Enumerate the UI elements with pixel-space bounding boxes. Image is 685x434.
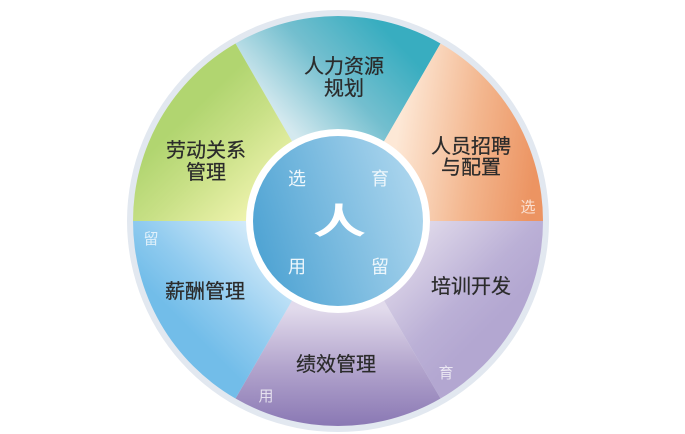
center hub: 选 bbox=[288, 169, 306, 189]
segment: 人力资源规划 bbox=[236, 16, 440, 221]
segment: 薪酬管理 bbox=[133, 221, 338, 398]
segment: 人员招聘与配置: 与配置 bbox=[441, 156, 501, 179]
segment: 劳动关系管理: 劳动关系 bbox=[166, 139, 246, 162]
segment: 培训开发 bbox=[338, 221, 543, 398]
segment: 薪酬管理: 留 bbox=[143, 231, 159, 248]
segment: 绩效管理: 绩效管理 bbox=[296, 353, 376, 376]
outer ring bbox=[127, 10, 549, 432]
center hub: 用 bbox=[288, 257, 306, 277]
segment: 绩效管理: 用 bbox=[258, 388, 274, 405]
center hub: 育 bbox=[371, 169, 389, 189]
segment: 人力资源规划: 规划 bbox=[324, 77, 364, 100]
segment: 劳动关系管理: 管理 bbox=[186, 161, 226, 184]
segment: 薪酬管理: 薪酬管理 bbox=[165, 280, 245, 303]
segment: 人力资源规划: 人力资源 bbox=[304, 55, 384, 78]
segment: 人员招聘与配置: 人员招聘 bbox=[431, 135, 511, 158]
center hub: 留 bbox=[371, 257, 389, 277]
segment: 人员招聘与配置 bbox=[338, 44, 543, 221]
center hub: 人 bbox=[313, 201, 366, 241]
segment: 人员招聘与配置: 选 bbox=[520, 199, 536, 216]
segment: 培训开发: 培训开发 bbox=[431, 275, 511, 298]
segment: 绩效管理 bbox=[236, 221, 440, 426]
segment: 培训开发: 育 bbox=[438, 365, 454, 382]
center hub bbox=[246, 129, 430, 313]
segment: 劳动关系管理 bbox=[133, 44, 338, 221]
